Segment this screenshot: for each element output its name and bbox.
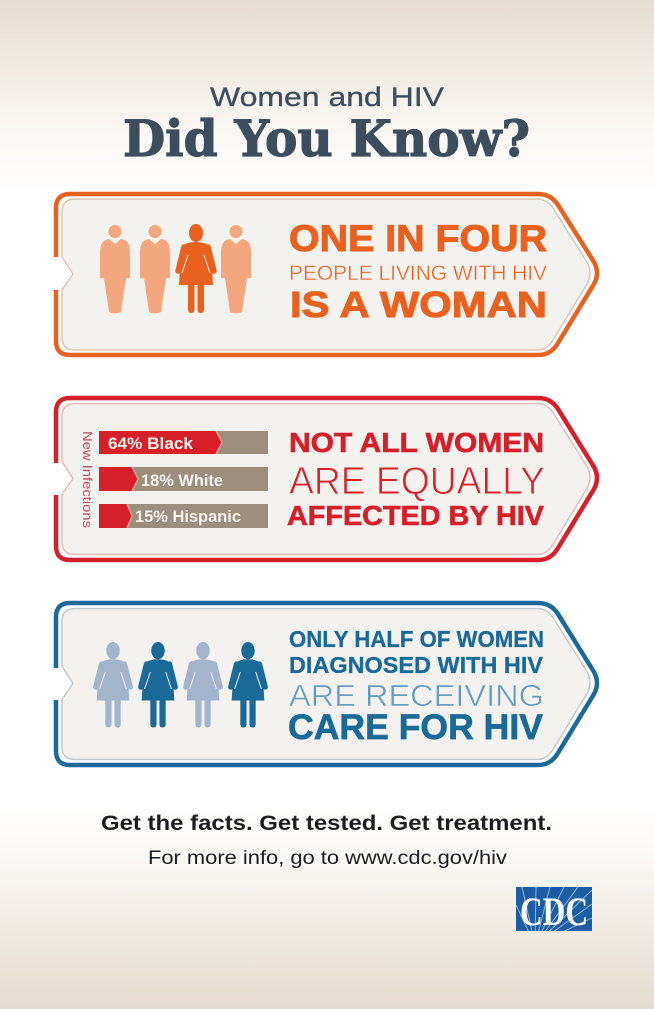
logo: CDC: CDC [520, 889, 588, 934]
text: not all women are equally affected by HIV: ARE EQUALLY [289, 460, 545, 503]
bar: 15% Hispanic: 15% Hispanic [135, 507, 241, 526]
more info link text: For more info, go to www.cdc.gov/hiv [148, 848, 508, 869]
text: one in four people living with HIV is a woman: ONE IN FOUR [289, 218, 547, 259]
bar: 18% White: 18% White [141, 471, 223, 490]
call to action: Get the facts. Get tested. Get treatment. [101, 812, 552, 835]
panel: only half of women [54, 601, 600, 767]
axis label: new infections: New Infections [80, 431, 94, 528]
title: Did You Know? [123, 109, 530, 168]
panel: one in four [54, 192, 600, 357]
bar: 64% Black [99, 431, 268, 454]
text: one in four people living with HIV is a woman [289, 218, 547, 325]
bar: 64% Black: 64% Black [108, 434, 194, 453]
text: one in four people living with HIV is a woman: IS A WOMAN [290, 284, 547, 325]
text: only half of women diagnosed with HIV are receiving care for HIV: DIAGNOSED WITH HIV [289, 652, 544, 678]
text: not all women are equally affected by HIV: NOT ALL WOMEN [289, 427, 544, 458]
text: only half of women diagnosed with HIV are receiving care for HIV: CARE FOR HIV [288, 708, 544, 747]
icon: four women, two highlighted [96, 642, 265, 727]
icon: four people, one woman highlighted [100, 224, 251, 314]
text: only half of women diagnosed with HIV are receiving care for HIV: ONLY HALF OF WOMEN [289, 626, 544, 652]
title: Women and HIV [210, 82, 444, 112]
bar chart: new infections by race [99, 431, 268, 528]
bar: 15% Hispanic [99, 504, 268, 528]
text: not all women are equally affected by HIV [287, 427, 545, 531]
text: only half of women diagnosed with HIV are receiving care for HIV [288, 626, 544, 747]
title [123, 82, 530, 168]
text: only half of women diagnosed with HIV are receiving care for HIV: ARE RECEIVING [289, 678, 544, 713]
text: not all women are equally affected by HIV: AFFECTED BY HIV [287, 500, 544, 531]
bar: 18% White [99, 467, 268, 491]
text: one in four people living with HIV is a woman: PEOPLE LIVING WITH HIV [289, 262, 547, 285]
panel: not all women [54, 396, 600, 562]
